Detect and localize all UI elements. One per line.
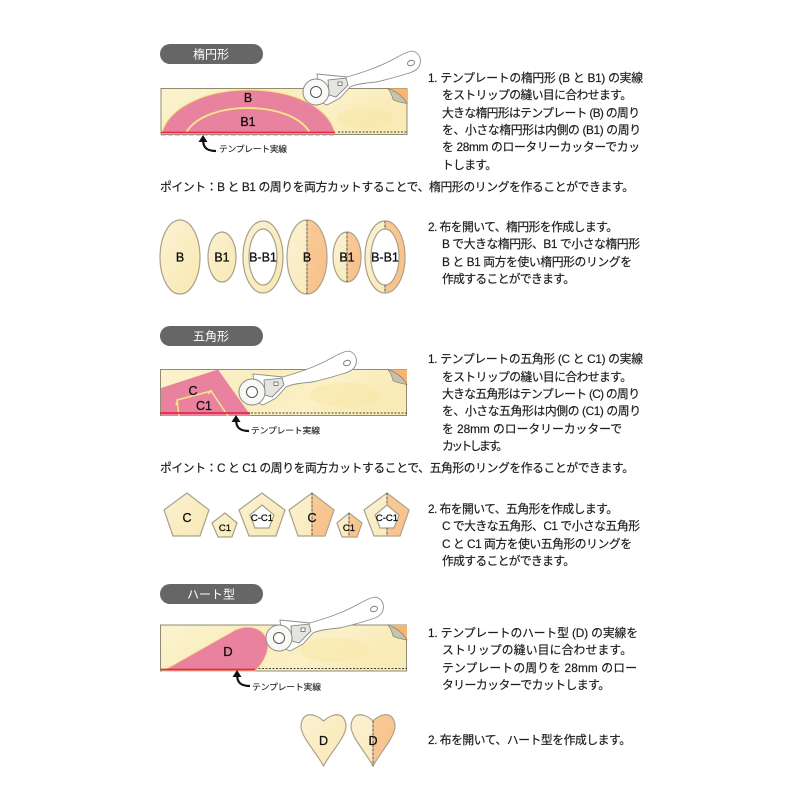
arrow and label: テンプレート実線: テンプレート実線 — [251, 424, 320, 436]
step text: ellipse step 2: 作成することができます。 — [442, 272, 575, 286]
section pill: ハート型 — [160, 584, 263, 604]
step text: ellipse step 1: トします。 — [442, 158, 497, 172]
pentagon shapes row: C-C1 — [376, 513, 398, 524]
step text: heart step 1: 1. テンプレートのハート型 (D) の実線を — [428, 626, 638, 640]
strip diagram: pentagon template on fabric: C1 — [196, 399, 212, 413]
ellipse shapes row: B — [303, 250, 311, 264]
pentagon shapes row: C-C1 — [251, 513, 273, 524]
step text: pentagon step 2: 作成することができます。 — [442, 554, 575, 568]
strip diagram: heart template on fabric: D — [223, 644, 233, 659]
strip diagram: pentagon template on fabric — [160, 351, 407, 416]
pentagon shapes row — [164, 493, 409, 537]
step text: pentagon step 1: カットします。 — [442, 439, 508, 453]
heart shapes: D — [368, 734, 378, 748]
step text: pentagon step 1: 1. テンプレートの五角形 (C と C1) の実線 — [428, 352, 643, 366]
pentagon shapes row: C — [182, 511, 192, 525]
inner yellow line B1 — [186, 108, 310, 133]
step text: ellipse step 1: を、小さな楕円形は内側の (B1) の周り — [442, 123, 641, 137]
section pill: 五角形: 五角形 — [193, 330, 229, 344]
step text: heart step 1: ストリップの縫い目に合わせます。 — [442, 643, 632, 657]
step text: heart step 2: 2. 布を開いて、ハート型を作成します。 — [428, 733, 631, 747]
section pill: 五角形 — [160, 326, 263, 346]
step text: ellipse step 1: 1. テンプレートの楕円形 (B と B1) の実線 — [428, 71, 643, 85]
step text: heart step 1 — [428, 626, 638, 692]
strip diagram: ellipse template on fabric: B — [244, 91, 252, 105]
step text: pentagon step 1: を、小さな五角形は内側の (C1) の周り — [442, 404, 641, 418]
point note: pentagon: ポイント：C と C1 の周りを両方カットすることで、五角形のリングを作ることができます。 — [160, 461, 634, 475]
step text: pentagon step 2: 2. 布を開いて、五角形を作成します。 — [428, 502, 618, 516]
step text: ellipse step 1: をストリップの縫い目に合わせます。 — [442, 88, 632, 102]
arrow and label: テンプレート実線: テンプレート実線 — [252, 681, 321, 692]
step text: ellipse step 1 — [428, 71, 643, 172]
step text: ellipse step 2: B で大きな楕円形、B1 で小さな楕円形 — [442, 237, 640, 251]
section pill: ハート型: ハート型 — [187, 588, 235, 602]
heart shapes — [301, 715, 395, 766]
step text: pentagon step 1: 大きな五角形はテンプレート (C) の周り — [442, 387, 640, 401]
pentagon shapes row: C1 — [219, 523, 231, 534]
step text: pentagon step 2 — [428, 502, 640, 568]
arrow and label: テンプレート実線 — [232, 670, 321, 692]
step text: ellipse step 2 — [428, 220, 640, 286]
arrow and label: テンプレート実線 — [232, 415, 320, 436]
ellipse shapes row — [160, 220, 405, 294]
heart shapes: D — [319, 734, 328, 748]
strip diagram: pentagon template on fabric: C — [188, 384, 198, 398]
strip diagram: ellipse template on fabric — [161, 51, 420, 135]
step text: ellipse step 2: 2. 布を開いて、楕円形を作成します。 — [428, 220, 618, 234]
step text: heart step 1: テンプレートの周りを 28mm のロー — [442, 661, 637, 675]
step text: ellipse step 1: 大きな楕円形はテンプレート (B) の周り — [442, 106, 640, 120]
step text: pentagon step 2: C で大きな五角形、C1 で小さな五角形 — [442, 519, 640, 533]
ellipse shapes row: B-B1 — [371, 250, 399, 264]
section pill: 楕円形 — [160, 44, 263, 64]
arrow and label: テンプレート実線 — [198, 135, 287, 154]
step text: pentagon step 1: を 28mm のロータリーカッターで — [442, 422, 622, 436]
step text: ellipse step 1: を 28mm のロータリーカッターでカッ — [442, 140, 640, 154]
step text: ellipse step 2: B と B1 両方を使い楕円形のリングを — [442, 255, 632, 269]
ellipse shapes row: B1 — [214, 250, 230, 264]
arrow and label: テンプレート実線: テンプレート実線 — [219, 143, 287, 154]
inner yellow line C1 — [176, 390, 228, 416]
pentagon shapes row: C1 — [343, 523, 355, 534]
step text: pentagon step 1 — [428, 352, 643, 453]
step text: heart step 1: タリーカッターでカットします。 — [442, 678, 610, 692]
step text: pentagon step 2: C と C1 両方を使い五角形のリングを — [442, 537, 632, 551]
point note: ellipse: ポイント：B と B1 の周りを両方カットすることで、楕円形のリングを作ることができます。 — [160, 180, 634, 194]
ellipse shapes row: B1 — [339, 250, 355, 264]
section pill: 楕円形: 楕円形 — [193, 48, 229, 62]
ellipse shapes row: B-B1 — [249, 250, 277, 264]
strip diagram: heart template on fabric — [160, 597, 407, 671]
step text: pentagon step 1: をストリップの縫い目に合わせます。 — [442, 370, 632, 384]
ellipse shapes row: B — [176, 250, 184, 264]
pentagon shapes row: C — [307, 511, 317, 525]
strip diagram: ellipse template on fabric: B1 — [240, 115, 256, 129]
